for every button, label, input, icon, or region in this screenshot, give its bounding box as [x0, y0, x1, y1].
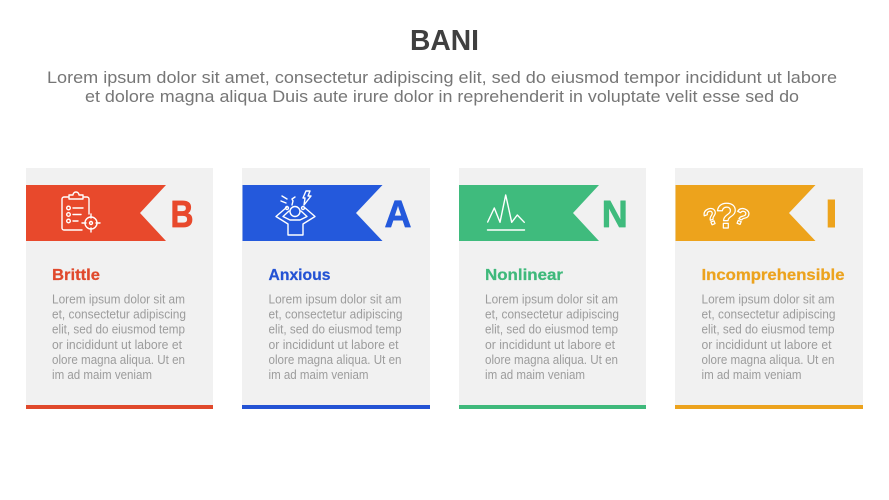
- letter: A: A: [384, 194, 412, 236]
- body text: Nonlinear: im ad maim veniam: [485, 367, 585, 382]
- body text: Anxious: Lorem ipsum dolor sit am: [268, 291, 402, 306]
- body text: Nonlinear: elit, sed do eiusmod temp: [485, 322, 618, 337]
- ribbon: Anxious: [242, 185, 382, 241]
- body text: Nonlinear: [485, 291, 619, 382]
- heading: Anxious: Anxious: [268, 267, 330, 284]
- body text: Brittle: or incididunt ut labore et: [52, 337, 182, 352]
- letter: N: N: [602, 194, 628, 236]
- letter: B: B: [170, 194, 194, 236]
- body text: Anxious: olore magna aliqua. Ut en: [268, 352, 402, 367]
- body text: Nonlinear: olore magna aliqua. Ut en: [485, 352, 618, 367]
- body text: Incomprehensible: [702, 291, 836, 382]
- letter: I: [828, 200, 835, 228]
- panel: Nonlinear: [459, 168, 646, 409]
- body text: Anxious: elit, sed do eiusmod temp: [268, 322, 402, 337]
- body text: Brittle: elit, sed do eiusmod temp: [52, 322, 185, 337]
- body text: Incomprehensible: olore magna aliqua. Ut en: [702, 352, 834, 367]
- body text: Brittle: [52, 291, 186, 382]
- body text: Anxious: or incididunt ut labore et: [268, 337, 399, 352]
- heading: Brittle: Brittle: [52, 267, 100, 284]
- subtitle: [47, 68, 837, 106]
- body text: Incomprehensible: im ad maim veniam: [702, 367, 802, 382]
- body text: Brittle: olore magna aliqua. Ut en: [52, 352, 185, 367]
- body text: Nonlinear: et, consectetur adipiscing: [485, 306, 619, 322]
- icon: question marks: ?: [731, 202, 753, 231]
- icon: question marks: ?: [700, 202, 722, 231]
- body text: Anxious: [268, 291, 402, 382]
- subtitle: Lorem ipsum dolor sit amet, consectetur adipiscing elit, sed do eiusmod tempor incididunt ut labore: [47, 68, 837, 87]
- title: BANI: [410, 25, 479, 57]
- icon: line graph: [488, 195, 524, 230]
- body text: Nonlinear: or incididunt ut labore et: [485, 337, 615, 352]
- body text: Incomprehensible: et, consectetur adipiscing: [702, 306, 836, 322]
- body text: Brittle: Lorem ipsum dolor sit am: [52, 291, 185, 306]
- body text: Brittle: et, consectetur adipiscing: [52, 306, 186, 322]
- heading: Incomprehensible: Incomprehensible: [702, 267, 845, 284]
- icon: question marks: ?: [716, 197, 737, 236]
- icon: clipboard with target: [62, 192, 100, 232]
- body text: Incomprehensible: Lorem ipsum dolor sit am: [702, 291, 834, 306]
- body text: Incomprehensible: or incididunt ut labore et: [702, 337, 832, 352]
- heading: Nonlinear: Nonlinear: [485, 267, 563, 284]
- panel: Incomprehensible: [675, 168, 863, 409]
- ribbon: Incomprehensible: [676, 185, 816, 241]
- ribbon: Nonlinear: [459, 185, 599, 241]
- icon: question marks: [700, 197, 753, 236]
- subtitle: et dolore magna aliqua Duis aute irure dolor in reprehenderit in voluptate velit esse sed do: [85, 87, 799, 106]
- body text: Brittle: im ad maim veniam: [52, 367, 152, 382]
- body text: Anxious: et, consectetur adipiscing: [268, 306, 402, 322]
- body text: Anxious: im ad maim veniam: [268, 367, 368, 382]
- body text: Nonlinear: Lorem ipsum dolor sit am: [485, 291, 618, 306]
- ribbon: Brittle: [26, 185, 166, 241]
- panel: Brittle: [26, 168, 213, 409]
- panel: Anxious: [242, 168, 430, 409]
- icon: stressed person: [276, 191, 315, 235]
- body text: Incomprehensible: elit, sed do eiusmod temp: [702, 322, 834, 337]
